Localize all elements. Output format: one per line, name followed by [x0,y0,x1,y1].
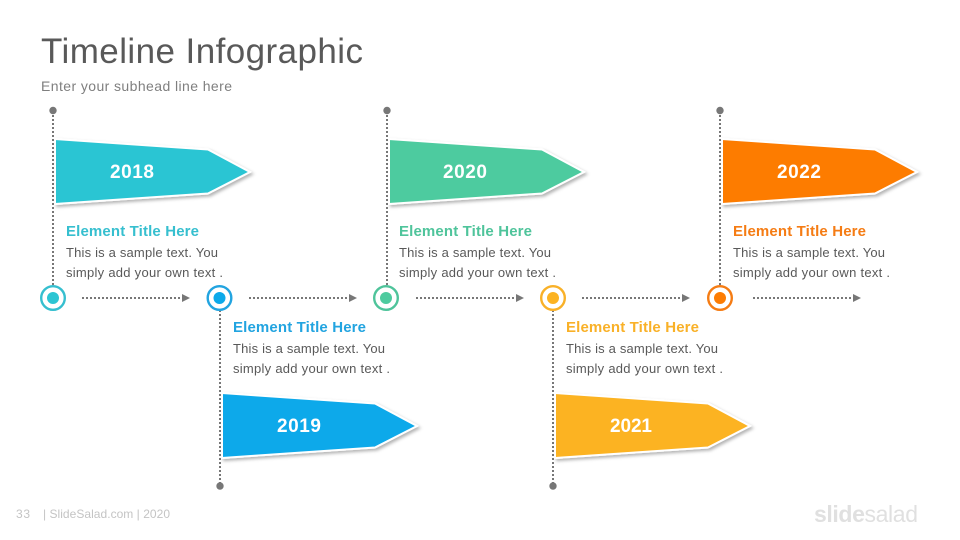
text block 2019: This is a sample text. You [233,341,385,356]
text block 2020: simply add your own text . [399,265,556,280]
node 2020 [374,286,398,310]
year 2018: 2018 [110,162,154,183]
text block 2022: Element Title Here [733,223,866,240]
text block 2021: Element Title Here [566,319,699,336]
connector 2018 [49,107,57,286]
timeline element 2021 [541,286,750,490]
text block 2019: Element Title Here [233,319,366,336]
text block 2018: This is a sample text. You [66,245,218,260]
timeline element 2019 [208,286,417,490]
arrow: 2019 to 2020 [249,294,357,302]
subhead: Enter your subhead line here [41,78,232,94]
footer credit: | SlideSalad.com | 2020 [43,507,170,521]
arrow: 2018 to 2019 [82,294,190,302]
year 2021: 2021 [610,416,652,437]
text block 2018: simply add your own text . [66,265,223,280]
arrow banner 2021 [555,393,750,458]
timeline element 2018 [41,107,250,310]
timeline element 2020 [374,107,584,310]
text block 2020 [399,223,556,280]
text block 2021: This is a sample text. You [566,341,718,356]
timeline element 2022 [708,107,917,310]
text block 2020: This is a sample text. You [399,245,551,260]
arrow banner 2018 [55,139,250,204]
text block 2021 [566,319,723,376]
text block 2019 [233,319,390,376]
arrow banner 2020 [389,139,584,204]
arrow: 2022 onward [753,294,861,302]
footer page number: 33 [16,507,30,521]
text block 2022 [733,223,890,280]
year 2020: 2020 [443,162,487,183]
node 2021 [541,286,565,310]
text block 2019: simply add your own text . [233,361,390,376]
text block 2020: Element Title Here [399,223,532,240]
year 2022: 2022 [777,162,821,183]
arrow banner 2019 [222,393,417,458]
connector 2019 [216,310,224,490]
text block 2022: This is a sample text. You [733,245,885,260]
year 2019: 2019 [277,416,321,437]
arrow: 2021 to 2022 [582,294,690,302]
connector 2022 [716,107,724,286]
node 2018 [41,286,65,310]
arrow: 2020 to 2021 [416,294,524,302]
node 2022 [708,286,732,310]
arrow banner 2022 [722,139,917,204]
logo wordmark: slidesalad [814,501,918,527]
text block 2022: simply add your own text . [733,265,890,280]
connector 2021 [549,310,557,490]
node 2019 [208,286,231,310]
connector 2020 [383,107,391,286]
text block 2018 [66,223,223,280]
text block 2021: simply add your own text . [566,361,723,376]
title: Timeline Infographic [41,32,363,71]
text block 2018: Element Title Here [66,223,199,240]
